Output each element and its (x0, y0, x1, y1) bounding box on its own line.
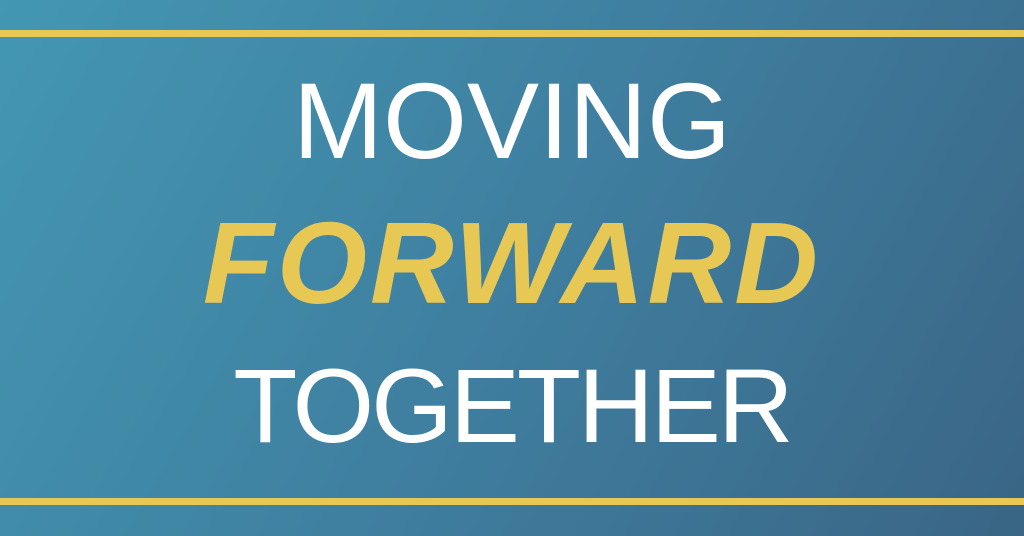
title line: MOVING: MOVING (293, 60, 731, 181)
title line: TOGETHER: TOGETHER (233, 348, 791, 465)
top rule (0, 30, 1024, 37)
title line: FORWARD: FORWARD (203, 198, 821, 328)
bottom rule (0, 498, 1024, 505)
